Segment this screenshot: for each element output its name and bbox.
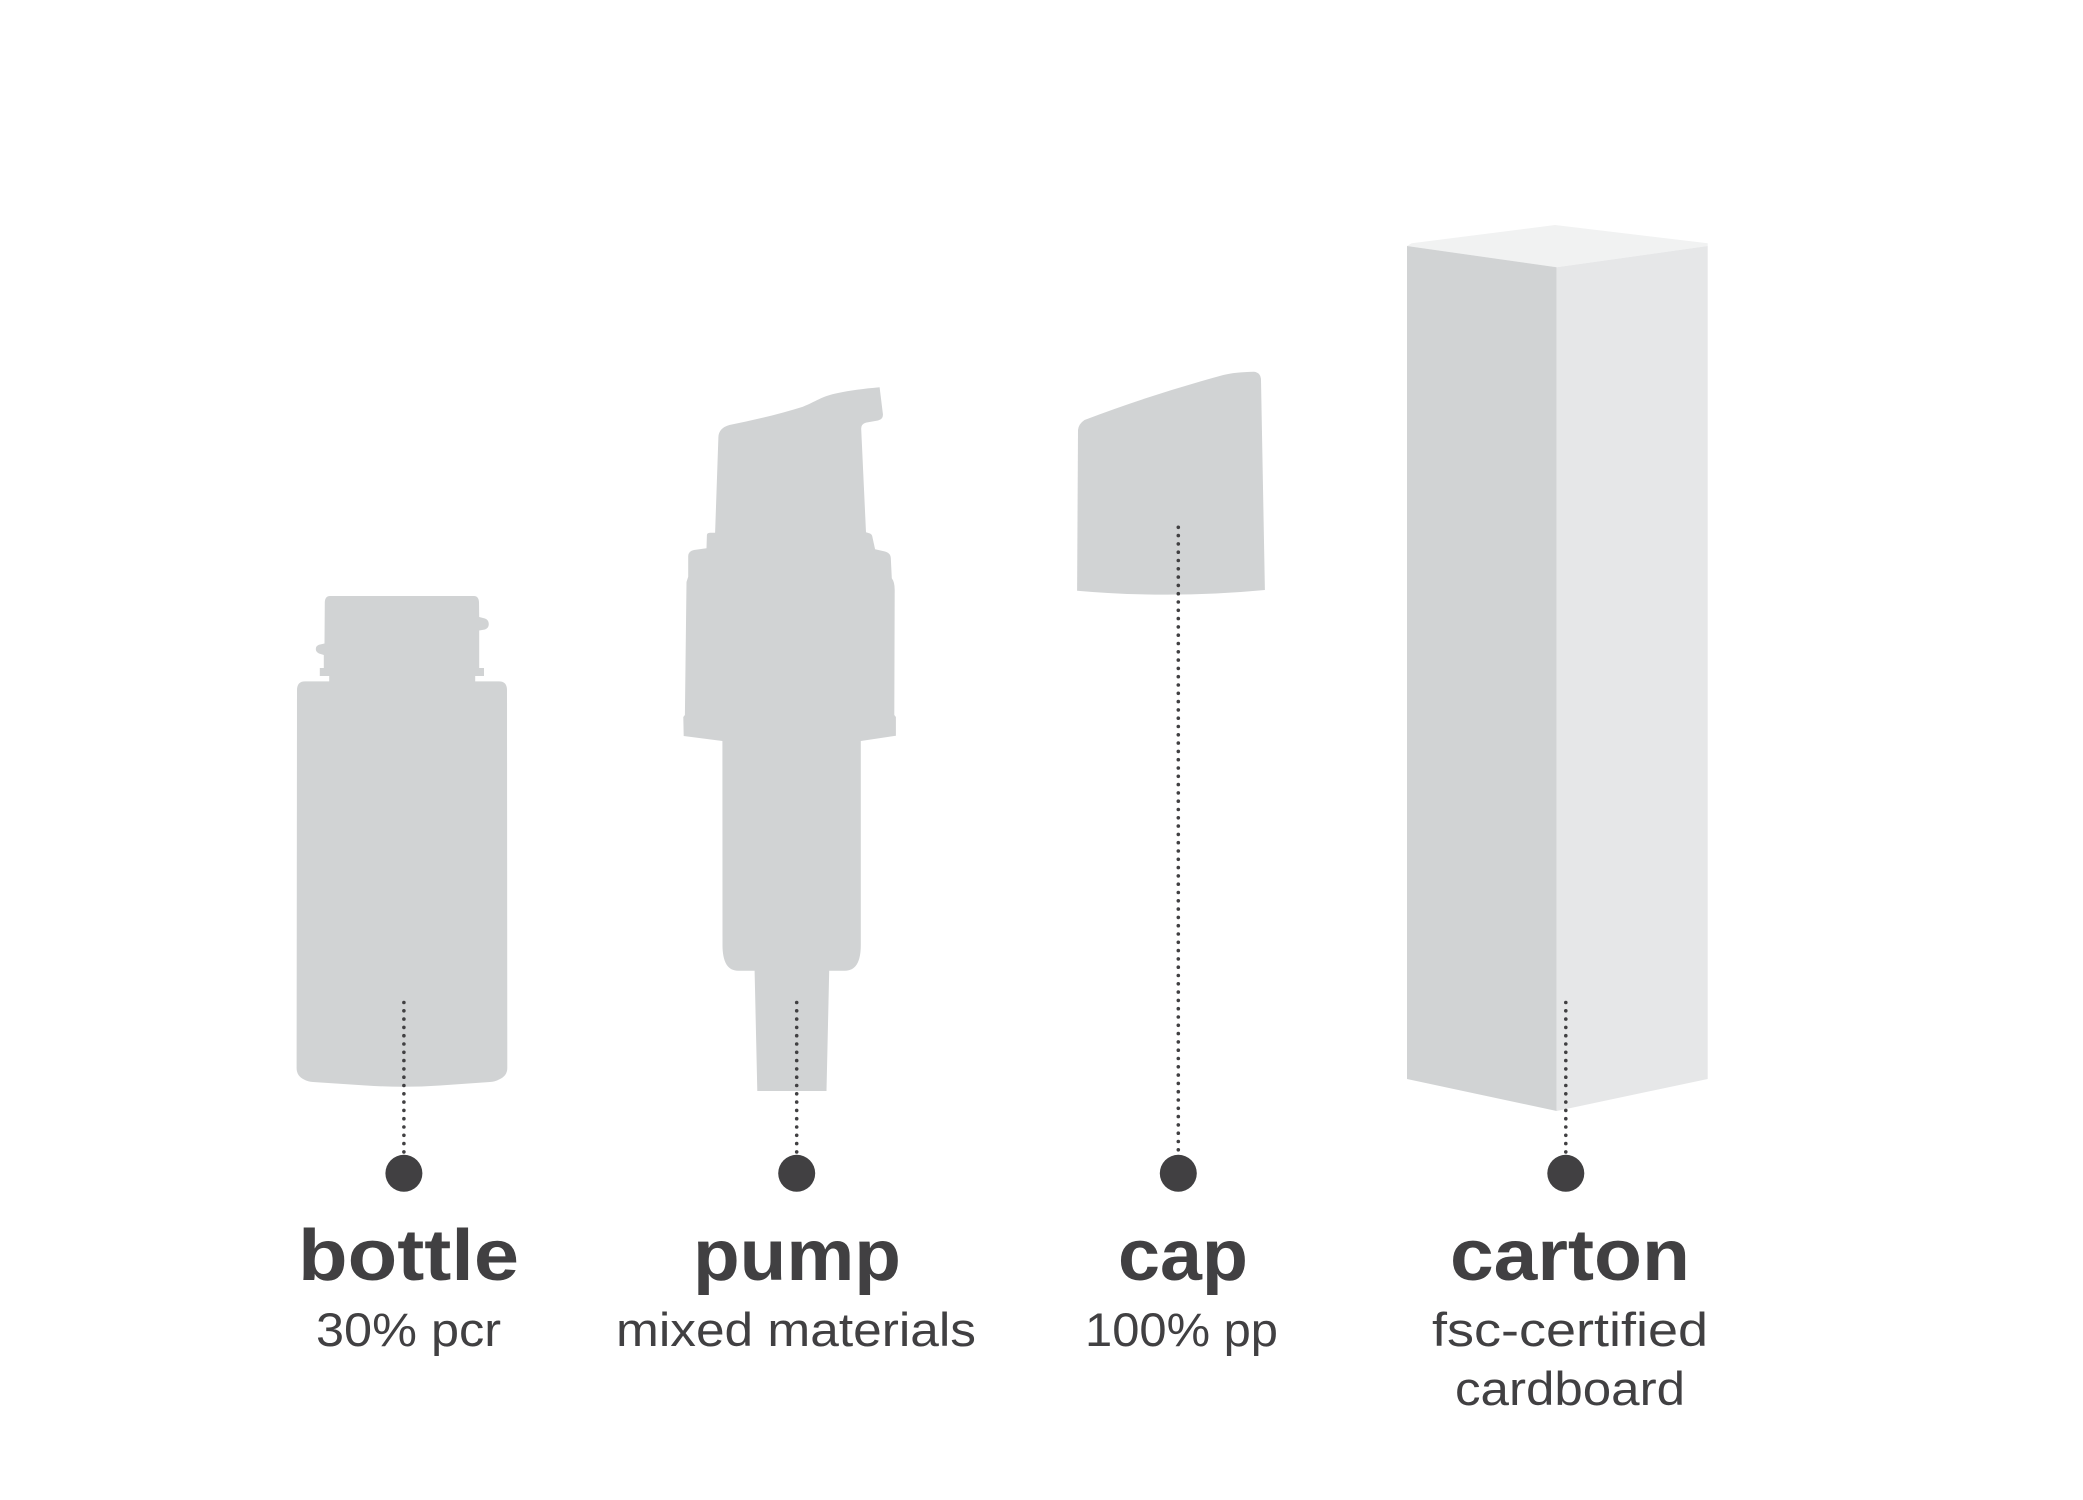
label: carton	[1432, 1216, 1708, 1415]
label: bottle: bottle	[298, 1216, 519, 1296]
icon: carton box	[1407, 225, 1708, 1111]
label: pump: mixed materials	[616, 1303, 976, 1356]
leader line: carton	[1547, 1002, 1584, 1192]
label: carton: carton	[1450, 1216, 1690, 1296]
label: bottle: 30% pcr	[316, 1303, 501, 1356]
carton top face	[1407, 225, 1708, 267]
label: cap: 100% pp	[1085, 1303, 1278, 1356]
icon: bottle silhouette	[297, 596, 507, 1087]
label: bottle	[298, 1216, 519, 1356]
carton right face	[1557, 246, 1708, 1111]
icon: cap silhouette	[1077, 372, 1265, 595]
label: pump: pump	[693, 1216, 901, 1296]
label: carton: cardboard	[1455, 1362, 1685, 1415]
leader line: bottle	[385, 1002, 422, 1192]
leader line: cap	[1160, 527, 1197, 1192]
label: cap: cap	[1118, 1216, 1248, 1296]
label: pump	[616, 1216, 976, 1356]
label: cap	[1085, 1216, 1278, 1356]
label: carton: fsc-certified	[1432, 1303, 1708, 1356]
carton left face	[1407, 246, 1557, 1111]
leader line: pump	[778, 1002, 815, 1192]
icon: pump silhouette	[683, 387, 896, 1091]
